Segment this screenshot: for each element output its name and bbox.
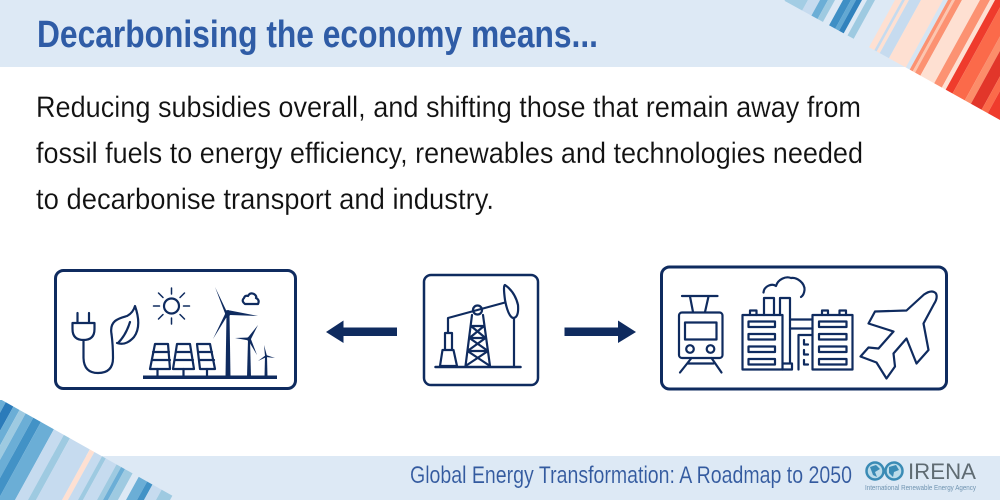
- header band: [0, 0, 1000, 67]
- title: Decarbonising the economy means...: [37, 14, 598, 56]
- body text: fossil fuels to energy efficiency, renewables and technologies needed: [36, 137, 863, 170]
- panel: transport and industry: [662, 267, 946, 389]
- body text: Reducing subsidies overall, and shifting those that remain away from: [36, 91, 861, 124]
- icon: oil pump jack: [436, 285, 520, 367]
- climate stripes: bottom left: [0, 400, 172, 500]
- icon: cloud: [243, 293, 259, 304]
- panel: oil pump: [424, 275, 538, 385]
- icon: airplane: [860, 291, 937, 378]
- icon: factory: [742, 277, 852, 370]
- footer band: [0, 456, 1000, 500]
- logo tagline: International Renewable Energy Agency: [865, 483, 976, 492]
- body text: to decarbonise transport and industry.: [36, 183, 494, 216]
- icon: sun: [154, 288, 190, 324]
- footer text: Global Energy Transformation: A Roadmap to 2050: [410, 462, 852, 489]
- icon: plug and leaf: [72, 306, 138, 373]
- logo wordmark: IRENA: [908, 459, 976, 484]
- body text: [36, 91, 863, 216]
- icon: solar panels: [150, 344, 215, 377]
- icon: wind turbines: [143, 287, 277, 379]
- climate stripes: top right: [784, 0, 1000, 120]
- logo: IRENA: [865, 459, 976, 492]
- panel: renewables: [56, 270, 296, 388]
- arrow: left: [326, 320, 397, 343]
- icon: train: [679, 296, 722, 372]
- logo globes: [866, 462, 902, 480]
- arrow: right: [564, 320, 636, 343]
